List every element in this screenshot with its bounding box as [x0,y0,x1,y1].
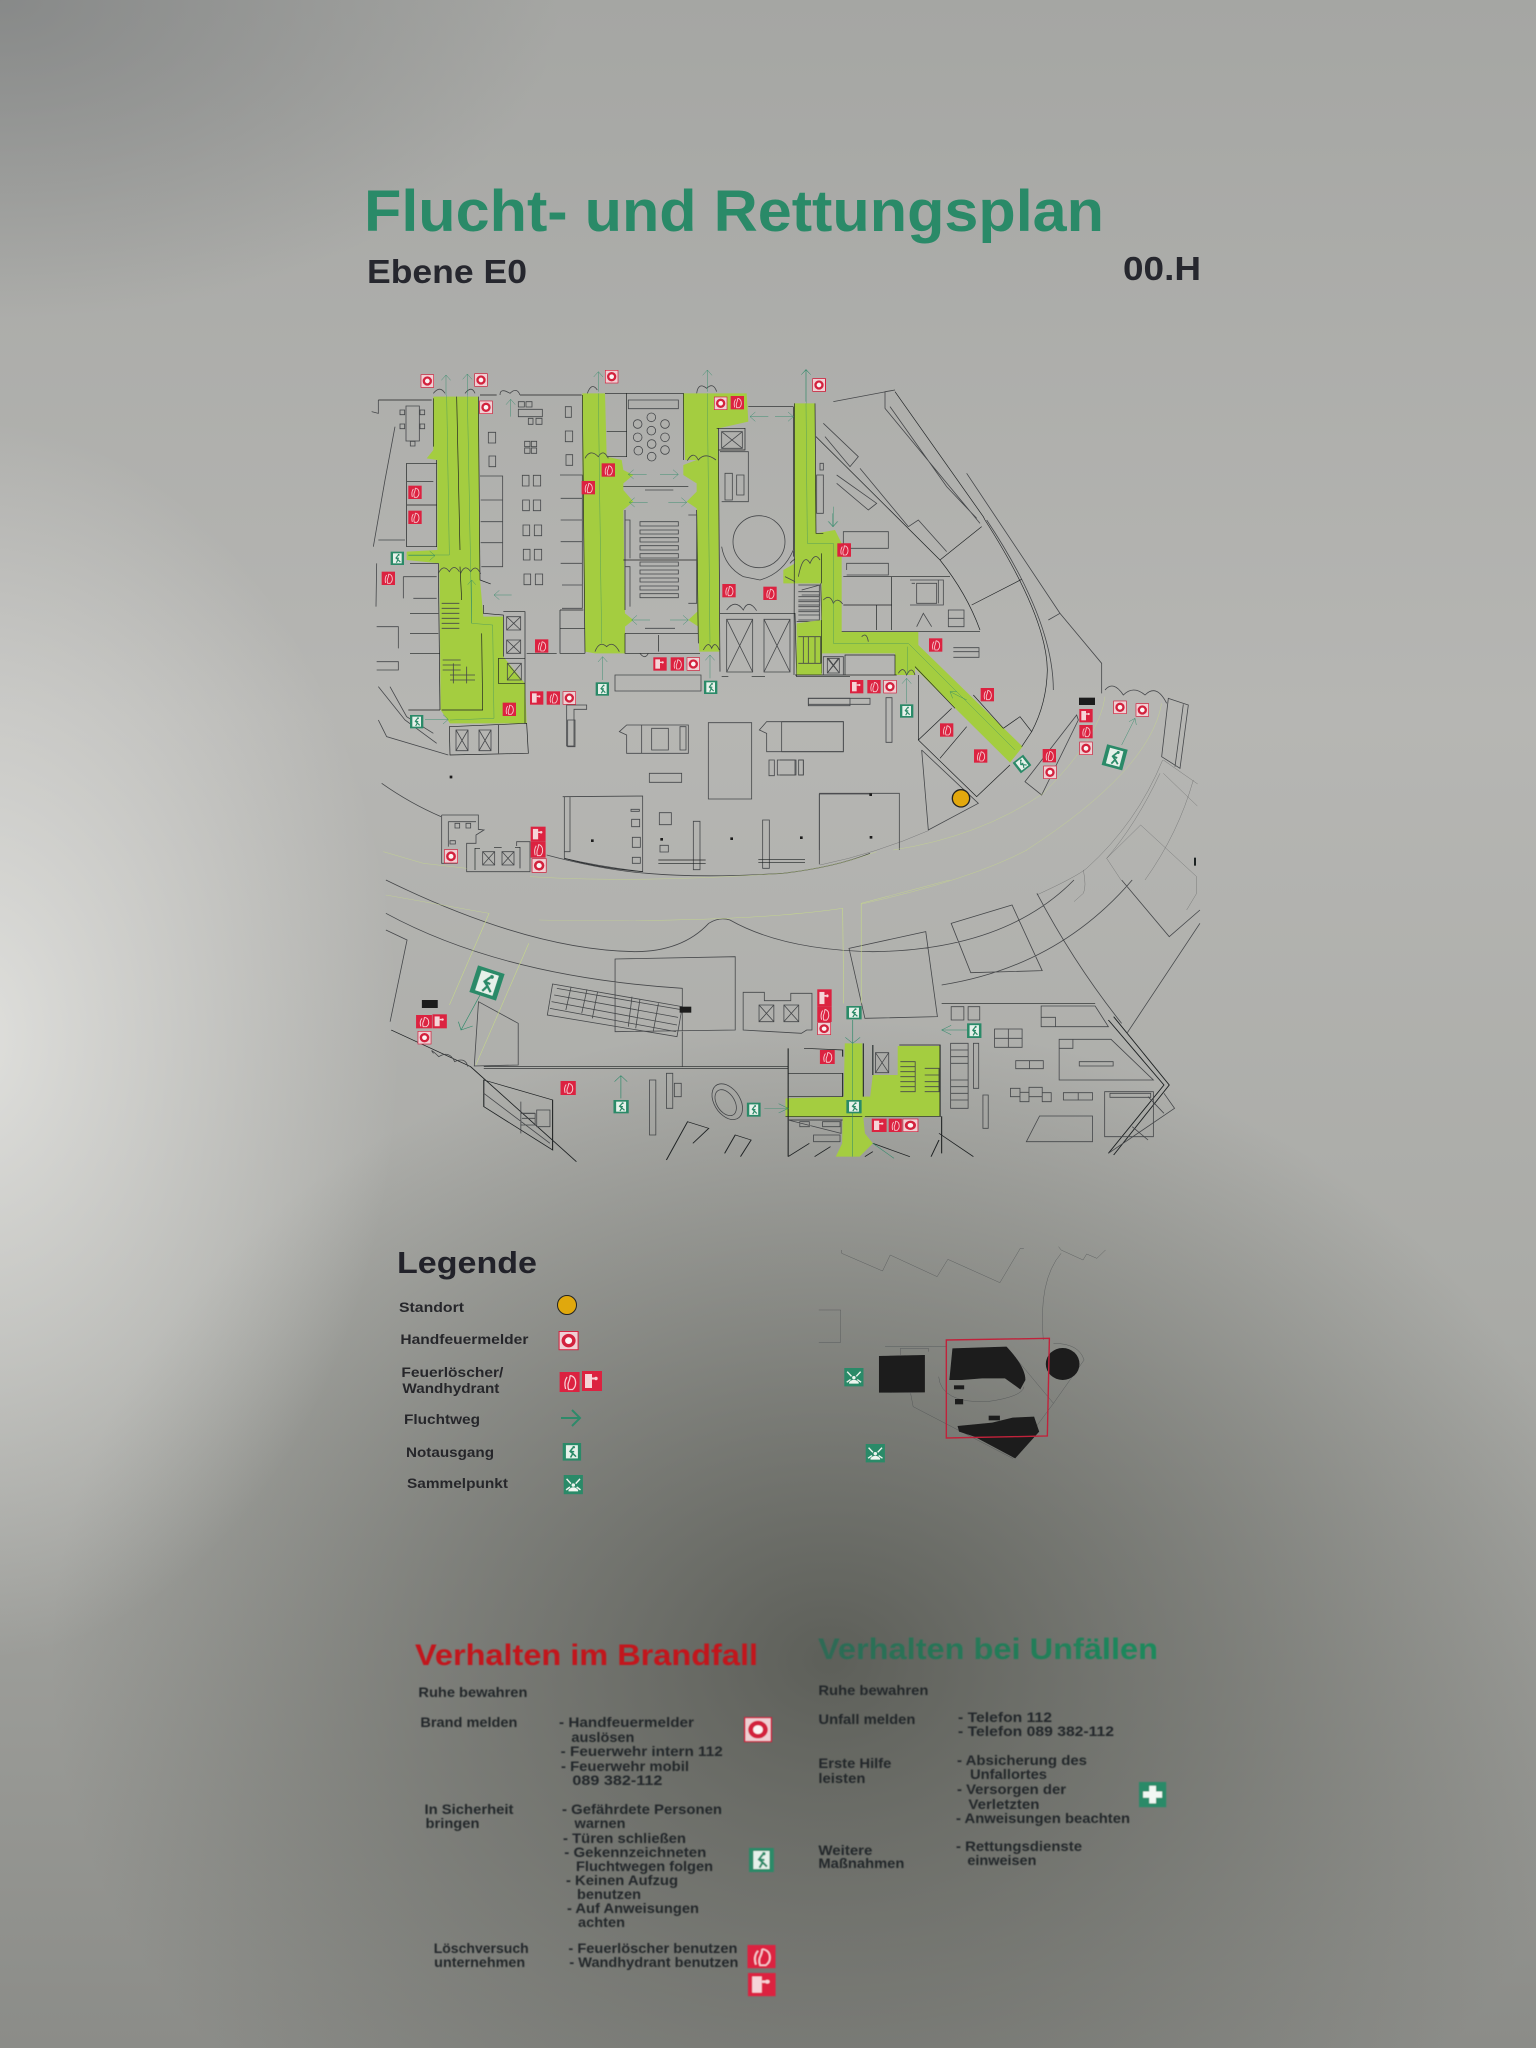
icons: plaza west block [444,827,546,872]
instructions: bring to safety: benutzen [577,1886,641,1902]
thin details south [386,880,1200,1153]
instructions: first aid: - Versorgen der [957,1781,1067,1797]
instructions: first aid: - Anweisungen beachten [956,1810,1130,1826]
legend: extinguisher and hydrant [401,1364,602,1396]
instructions: bring to safety: - Auf Anweisungen [567,1900,699,1916]
walls west [378,393,850,755]
instructions: bring to safety: achten [578,1914,625,1930]
icons: emergency exits west [391,552,717,728]
red location frame [946,1338,1049,1438]
plaza guide lines [893,697,1162,850]
icon: extinguisher [748,1945,776,1968]
icon: fire alarm [745,1718,771,1742]
icons: emergency exits south [613,1006,981,1117]
instructions: further measures: Maßnahmen [818,1855,904,1871]
legend: location: Standort [399,1299,464,1315]
instructions: bring to safety: bringen [426,1815,480,1831]
instructions: report accident: Unfall melden [818,1711,915,1727]
instructions: extinguish: Löschversuch [434,1940,529,1956]
instructions: report fire: - Feuerwehr intern 112 [561,1743,723,1759]
escape routes south [852,1043,854,1157]
floor plan: north building [372,369,1198,910]
legend: assembly point: Sammelpunkt [407,1475,508,1491]
instructions: bring to safety: - Keinen Aufzug [566,1872,678,1888]
panel: accident behaviour [818,1633,1166,1871]
courtyard outlines [382,720,870,876]
instructions: first aid: - Absicherung des [957,1752,1087,1768]
icons: wall hydrants south [432,989,887,1132]
instructions: report fire: auslösen [571,1729,634,1745]
icons: fire alarms west [421,370,826,704]
instructions: further measures [818,1838,1082,1871]
instructions: report fire: - Feuerwehr mobil [561,1758,689,1774]
instructions: extinguish: - Feuerlöscher benutzen [568,1940,737,1956]
black panels south [422,1000,691,1013]
floor plan: south building [386,880,1200,1162]
walls east [794,392,1047,797]
instructions: extinguish: - Wandhydrant benutzen [569,1954,738,1970]
legend: extinguisher and hydrant: Wandhydrant [402,1380,500,1396]
instructions: report accident: - Telefon 089 382-112 [958,1723,1114,1739]
guide lines south [386,880,950,1065]
outer arcs east [820,760,1198,910]
icons: wall hydrants west [530,657,667,705]
icon: large rotated emergency exit south [469,965,505,1001]
legend: escape route: Fluchtweg [404,1411,480,1427]
instructions: report fire [420,1714,723,1788]
door swings [433,386,819,657]
instructions: bring to safety: - Gekennzeichneten [564,1844,706,1860]
instructions: first aid [818,1752,1130,1826]
legend: emergency exit [406,1443,581,1461]
escape route lines west [408,393,833,720]
plaza structures west and centre [382,720,877,879]
escape arrows south [458,995,968,1158]
icons: fire alarms east [813,379,1149,779]
legend: location [399,1296,576,1315]
site buildings [879,1347,1079,1458]
icons: fire alarms south [418,1023,918,1132]
title: Flucht- und Rettungsplan [364,179,1104,244]
icons: extinguishers east [837,543,1093,763]
pillars east [869,793,872,839]
plan number: 00.H [1123,250,1201,287]
heading: accidents: Verhalten bei Unfällen [818,1633,1158,1666]
instructions: report accident [818,1709,1114,1739]
instructions: bring to safety: In Sicherheit [424,1801,514,1817]
walls south [391,1003,1169,1162]
instructions: bring to safety: Fluchtwegen folgen [576,1858,713,1874]
instructions: report fire: - Handfeuermelder [559,1714,695,1730]
black marker east [1194,858,1196,866]
west wing, columns A to C [372,369,851,755]
black panel east [1079,698,1095,705]
instructions: bring to safety [424,1801,722,1930]
icons: extinguishers west [382,396,851,716]
green escape corridors west [407,393,748,723]
instructions: first aid: leisten [818,1770,865,1786]
legend: extinguisher and hydrant: Feuerlöscher/ [401,1364,504,1380]
legend: emergency exit: Notausgang [406,1444,494,1460]
legend: assembly point [407,1475,583,1494]
current location marker [952,790,970,807]
instructions: bring to safety: - Türen schließen [563,1830,686,1846]
thin room details west [372,386,850,755]
icons: extinguishers south [416,1007,902,1132]
instructions: stay calm: Ruhe bewahren [818,1682,928,1698]
heavy benches and lift walls [475,847,805,872]
legend: fire alarm: Handfeuermelder [400,1331,529,1347]
legend heading: Legende [397,1245,537,1280]
icons: wall hydrants east [850,680,1093,722]
east wing with curved hall and diagonal corridor [780,370,1188,850]
instructions: report accident: - Telefon 112 [958,1709,1052,1725]
subtitle: level: Ebene E0 [367,253,527,290]
guide line east [862,850,1027,904]
legend: fire alarm [400,1331,578,1350]
escape arrows east [801,370,1136,745]
pillars [450,776,803,842]
plaza structures east [820,760,1198,910]
instructions: report fire: 089 382-112 [572,1772,663,1788]
instructions: first aid: Erste Hilfe [818,1755,892,1771]
guide lines plaza [383,852,877,879]
green corridors south [786,1043,940,1157]
green escape corridor east [783,403,1023,763]
site assembly points [844,1368,885,1462]
legend [397,1245,602,1494]
instructions: bring to safety: - Gefährdete Personen [562,1801,722,1817]
instructions: bring to safety: warnen [573,1815,626,1831]
icon: exit [749,1848,774,1872]
icon: hydrant [748,1973,776,1996]
escape route lines east [806,403,1015,750]
instructions: first aid: Verletzten [968,1796,1039,1812]
escape arrows west [408,369,837,724]
instructions: further measures: einweisen [967,1852,1036,1868]
thin outlines east [780,390,1188,850]
instructions: report fire: Brand melden [420,1714,517,1730]
icons: emergency exits east [900,704,1128,773]
instructions: stay calm: Ruhe bewahren [418,1684,527,1700]
heading: fire: Verhalten im Brandfall [415,1639,758,1672]
site outlines [819,1247,1106,1458]
instructions: further measures: - Rettungsdienste [956,1838,1082,1854]
instructions: extinguish: unternehmen [434,1954,525,1970]
instructions: first aid: Unfallortes [970,1766,1047,1782]
instructions: further measures: Weitere [818,1842,873,1858]
panel: fire behaviour [415,1639,776,1996]
legend: escape route [404,1410,580,1427]
site overview map [819,1247,1106,1462]
instructions: extinguish [434,1940,738,1970]
icon: first aid [1139,1782,1166,1807]
